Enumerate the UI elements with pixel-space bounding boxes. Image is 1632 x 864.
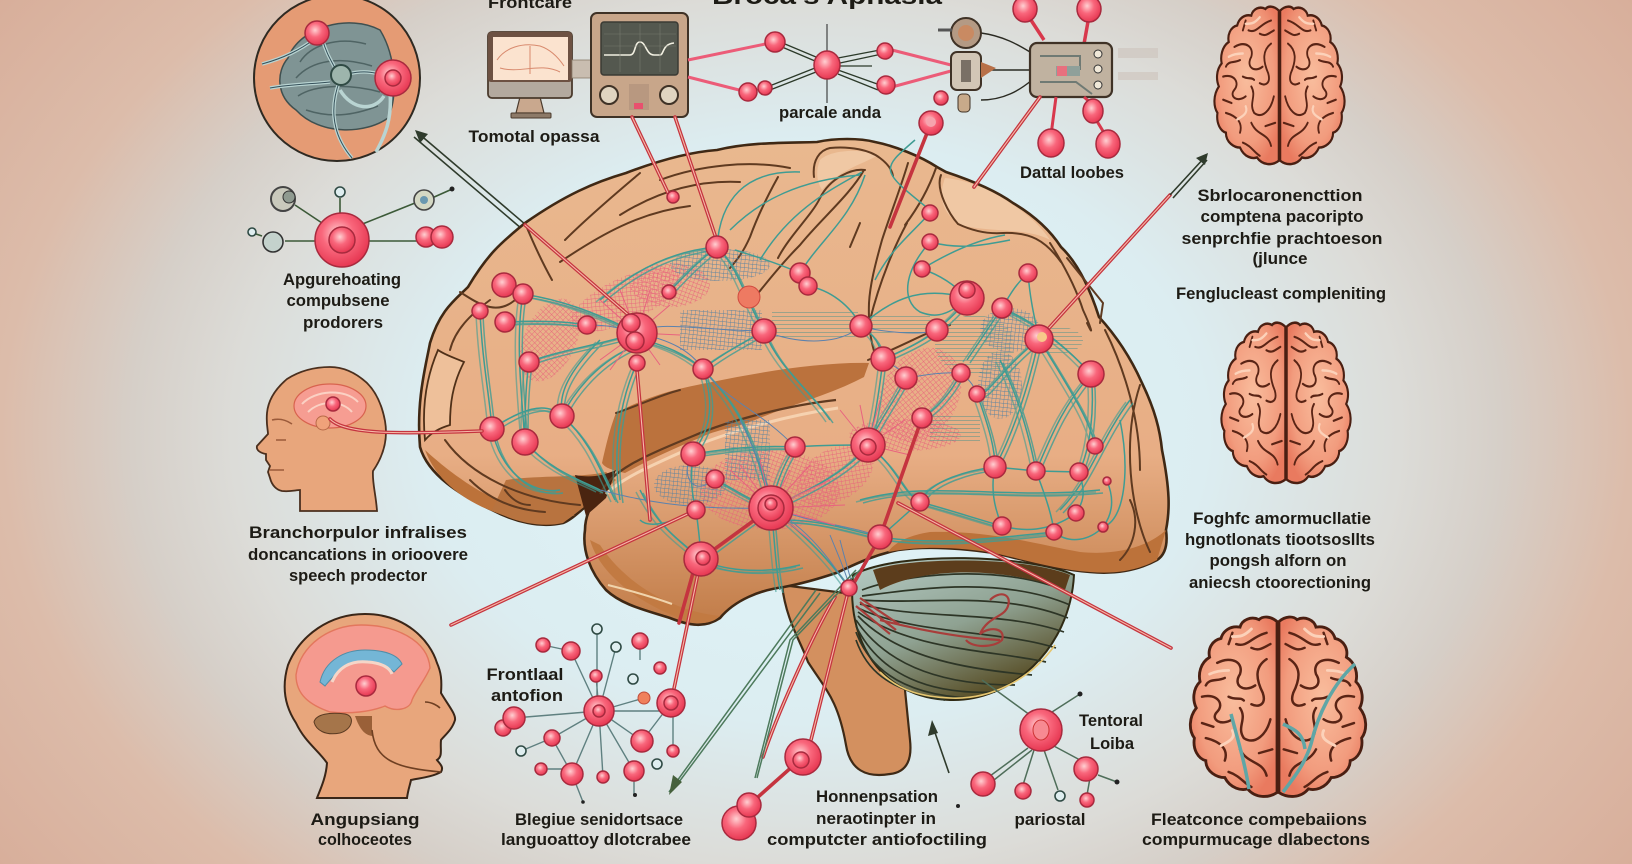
text: right caption 2	[1185, 510, 1375, 592]
text: compensation caption: Honnenpsation	[816, 788, 938, 806]
text: left network caption: compubsene	[286, 292, 390, 310]
icon: connector chip	[934, 0, 1158, 158]
sylvian fissure shading	[602, 363, 869, 473]
label: dattal lobes: Dattal loobes	[1020, 164, 1124, 182]
label: temporal lobe: Loiba	[1090, 735, 1135, 753]
text: right caption 3: compurmucage dlabectons	[1142, 831, 1370, 849]
label: temporal lobe: Tentoral	[1079, 712, 1143, 730]
text: right caption 1: (jlunce	[1252, 250, 1308, 268]
text: right caption 2: Foghfc amormucllatie	[1193, 510, 1371, 528]
text: bottom left caption: Angupsiang	[310, 811, 420, 829]
red leader lines over brain	[451, 97, 1208, 808]
label: parcale anda: parcale anda	[779, 104, 882, 122]
text: right caption 1: comptena pacoripto	[1200, 208, 1364, 226]
text: left head caption: speech prodector	[289, 567, 428, 585]
label: temporal opassa: Tomotal opassa	[468, 128, 600, 146]
text: right caption 2: hgnotlonats tiootsosllts	[1185, 531, 1375, 549]
bottom rim shading	[888, 530, 1166, 573]
arrow to lesion circle	[414, 130, 640, 326]
icon: paired nodes lower	[722, 739, 821, 840]
text: left network caption	[283, 271, 401, 332]
text: right caption 1: senprchfie prachtoeson	[1182, 230, 1382, 248]
icon: oscilloscope device	[591, 13, 688, 117]
text: bottom left caption	[310, 811, 420, 849]
icon: head profile bottom left	[285, 614, 455, 798]
icon: top-view brain 2	[1221, 323, 1351, 483]
text: right caption 3: Fleatconce compebaiions	[1151, 811, 1367, 829]
brain nodes	[472, 111, 1111, 596]
illustration: zoomed lesion circle	[254, 0, 420, 161]
icon: monitor	[488, 32, 591, 118]
text: left network caption: prodorers	[303, 314, 383, 332]
icon: head profile left	[257, 367, 482, 511]
text: left head caption	[248, 524, 468, 585]
icon: neuron network temporal	[971, 680, 1120, 807]
label: frontal anatomy: antofion	[491, 687, 563, 705]
label: parietal: pariostal	[1014, 811, 1086, 829]
text: bottom middle caption: Blegiue senidortsace	[515, 811, 683, 829]
text: right caption 1	[1176, 187, 1386, 303]
text: right caption 2: aniecsh ctoorectioning	[1189, 574, 1371, 592]
icon: neuron network left	[248, 186, 454, 267]
text: right caption 1: Sbrlocaronencttion	[1198, 187, 1362, 205]
connector network top	[688, 24, 951, 103]
text: right caption 2: pongsh alforn on	[1210, 552, 1346, 570]
text: bottom middle caption: languoattoy dlotcrabee	[501, 831, 691, 849]
cerebrum outline	[419, 139, 1169, 625]
main brain	[419, 139, 1169, 775]
text: bottom middle caption	[501, 811, 691, 849]
text: bottom left caption: colhoceotes	[318, 831, 412, 849]
text: left network caption: Apgurehoating	[283, 271, 401, 289]
text: compensation caption	[767, 788, 987, 849]
text: right caption 1: Fenglucleast compleniting	[1176, 285, 1386, 303]
cerebellum	[852, 558, 1074, 700]
brain stem	[782, 585, 910, 775]
lower frontal shadow	[492, 472, 616, 525]
temporal lobe edge and highlight	[600, 400, 836, 494]
icon: neuron network bottom middle	[495, 624, 685, 804]
text: right caption 3	[1142, 811, 1370, 849]
gyri folds	[445, 147, 1150, 560]
icon: top-view brain 1	[1214, 7, 1345, 164]
text: compensation caption: neraotinpter in	[816, 810, 936, 828]
hatched fibre bundles	[508, 249, 1083, 530]
label: frontal anatomy: Frontlaal	[486, 666, 564, 684]
text: left head caption: doncancations in orioovere	[248, 546, 468, 564]
label: temporal lobe	[1079, 712, 1143, 753]
frontal pole gyrus	[424, 350, 464, 440]
icon: top-view brain 3	[1190, 617, 1366, 796]
label: frontal anatomy	[486, 666, 564, 705]
text: left head caption: Branchorpulor infralises	[249, 524, 467, 542]
text: compensation caption: computcter antiofoctiling	[767, 831, 987, 849]
parietal lobe highlight	[942, 178, 1050, 240]
teal wiring	[476, 140, 1133, 593]
